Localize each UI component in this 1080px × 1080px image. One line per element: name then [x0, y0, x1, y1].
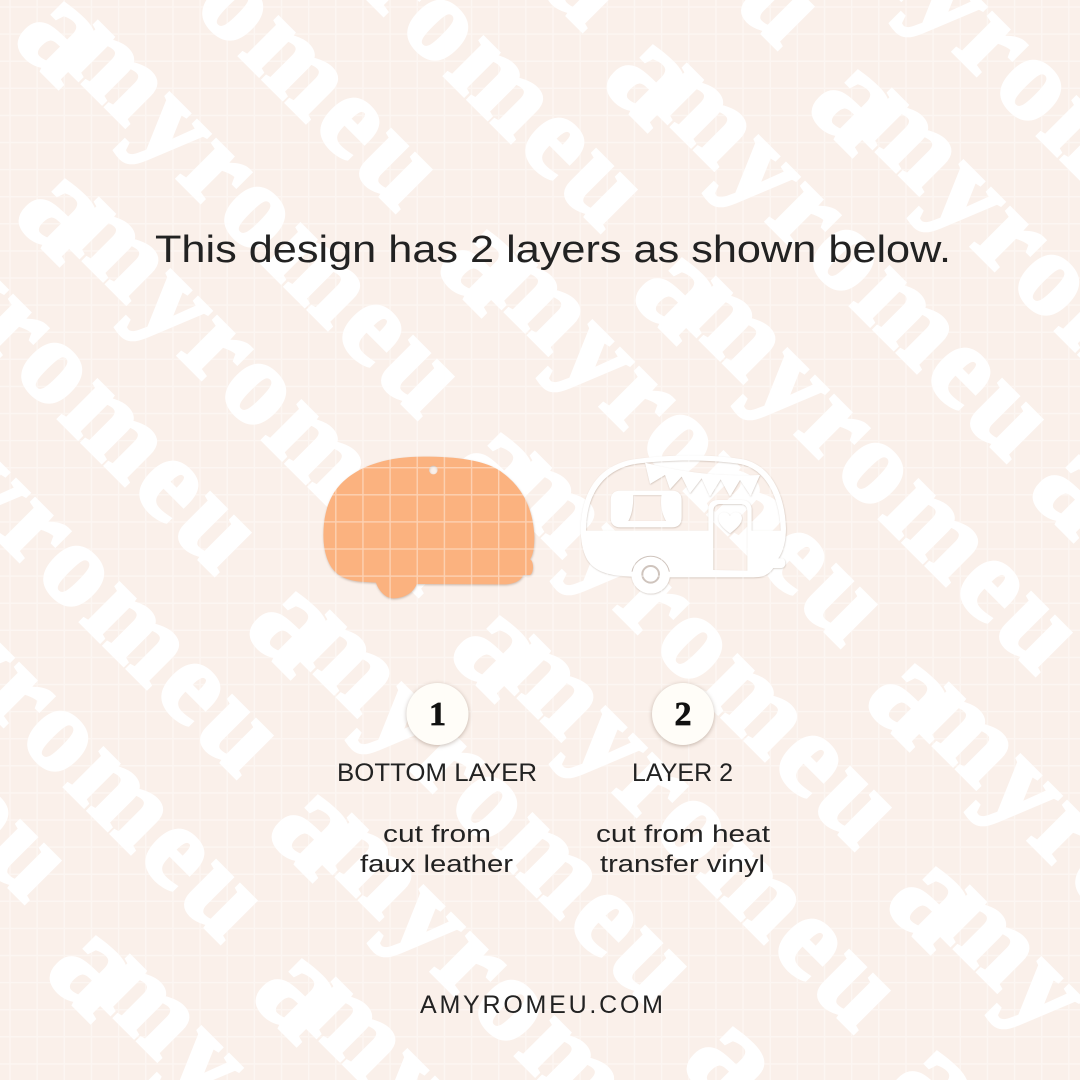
bunting [645, 463, 760, 497]
title: This design has 2 layers as shown below. [155, 229, 951, 271]
text: myromeu [462, 212, 921, 671]
layer 1 description [360, 821, 513, 878]
text: myromeu [40, 161, 499, 620]
layer 2 description: cut from heat [596, 821, 770, 848]
text: a [607, 208, 769, 371]
layer 1 number badge [406, 683, 468, 745]
text: myromeu [271, 574, 730, 1033]
text: myromeu [628, 27, 1080, 486]
text: a [426, 383, 588, 546]
door heart [718, 512, 742, 533]
text: a [21, 886, 183, 1049]
text: a [861, 817, 1023, 980]
layer 2 number badge: 2 [674, 696, 692, 733]
camper body and frame [581, 455, 786, 577]
text: a [243, 745, 405, 908]
camper window [611, 491, 682, 527]
layer 1 heading: BOTTOM LAYER [337, 759, 537, 787]
layer 2 description: transfer vinyl [600, 851, 765, 878]
icon: white camper layer 2 [581, 455, 786, 594]
text: a [425, 566, 587, 729]
icon: orange camper bottom layer [323, 457, 534, 598]
wheel [631, 555, 670, 594]
website footer: AMYROMEU.COM [420, 991, 663, 1019]
text: a [227, 909, 389, 1072]
layer 2 description [596, 821, 770, 878]
text: a [840, 614, 1002, 777]
layer 2 number badge [652, 683, 714, 745]
text: myromeu [475, 598, 934, 1057]
layer 2 heading: LAYER 2 [632, 759, 733, 787]
text: a [412, 180, 574, 343]
layer 1 description: cut from [383, 821, 491, 848]
text: myromeu [476, 415, 935, 874]
text: a [221, 542, 383, 705]
layer 1 number badge: 1 [429, 696, 446, 733]
layer 1 description: faux leather [360, 851, 513, 878]
text: a [578, 0, 740, 158]
text: a [783, 20, 945, 183]
